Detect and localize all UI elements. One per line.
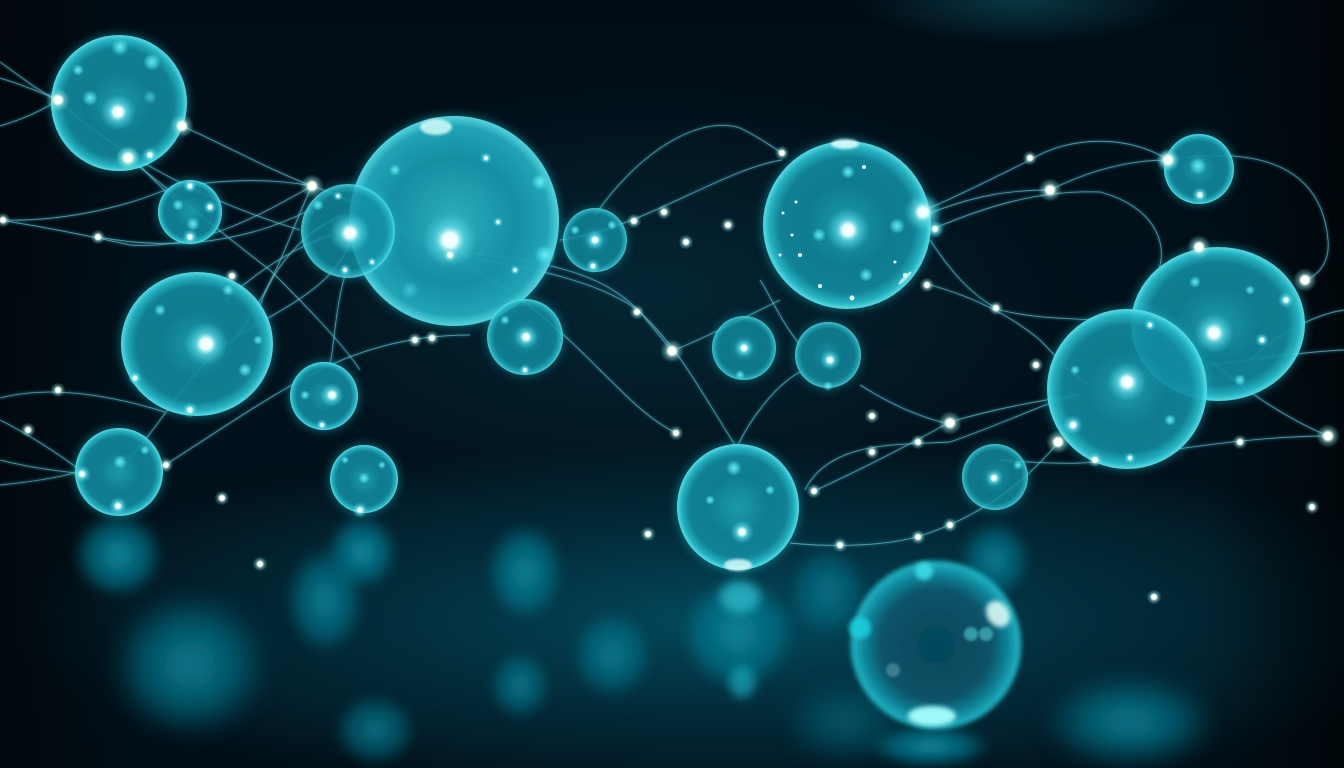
sphere: lower small — [330, 445, 398, 518]
sphere: top left — [51, 35, 187, 171]
sphere: lower centre — [677, 444, 799, 571]
sphere: large centre top — [349, 116, 559, 326]
sphere: right front — [1047, 309, 1207, 469]
sphere: lower left — [73, 428, 163, 516]
sphere: left middle — [121, 272, 273, 418]
sphere: large centre right — [763, 139, 944, 309]
sphere: overlapping small left of large — [301, 184, 395, 278]
sphere: small centre top — [563, 208, 627, 273]
sphere: foreground floor — [849, 560, 1022, 730]
sphere: small middle pair right — [795, 322, 861, 391]
sphere: small below left middle — [290, 362, 358, 431]
sphere: right rear — [1131, 247, 1305, 401]
glowing network nodes — [0, 88, 1340, 604]
floor reflections — [72, 511, 1215, 768]
sphere: small middle pair left — [712, 316, 776, 380]
sphere: lower right small — [962, 444, 1028, 510]
network fibres — [0, 62, 1344, 545]
sphere: top right small — [1158, 134, 1234, 204]
sphere: small under large — [487, 299, 563, 376]
sphere: small upper left — [158, 179, 222, 245]
